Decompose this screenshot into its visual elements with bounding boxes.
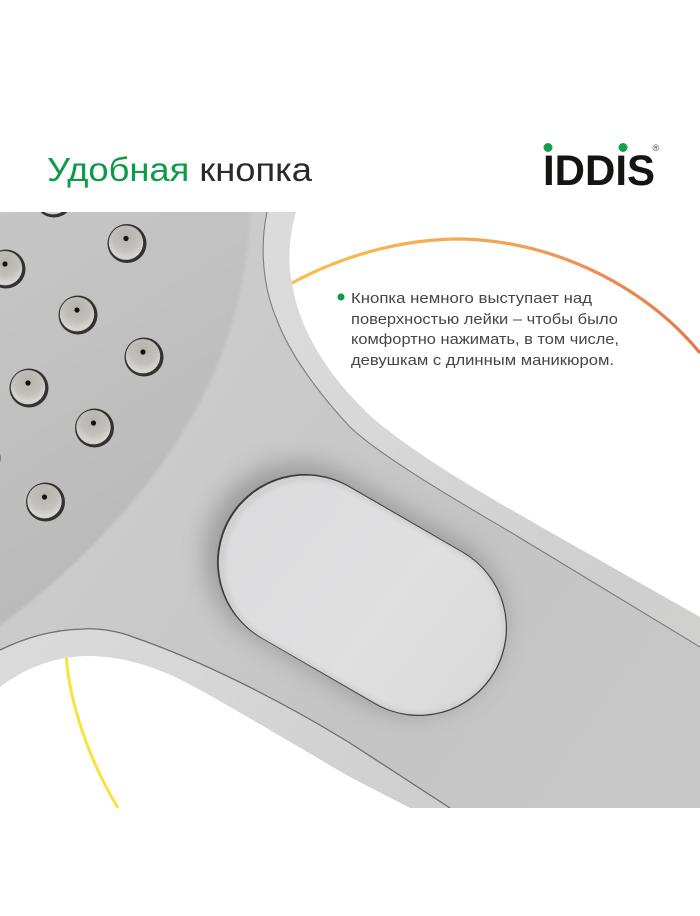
description text: Кнопка немного выступает над [351, 291, 593, 307]
shower head photo [0, 178, 700, 808]
description text: комфортно нажимать, в том числе, [351, 332, 619, 348]
bullet [338, 294, 344, 300]
button recess shadow [298, 555, 412, 621]
upper seam line [263, 212, 700, 647]
yellow arc [66, 650, 118, 808]
logo dot right [618, 143, 628, 152]
description text [351, 291, 619, 369]
description text: поверхностью лейки – чтобы было [351, 312, 618, 328]
handle inner surface [0, 212, 700, 808]
title: Удобная кнопка [47, 152, 312, 189]
orange gradient arc [290, 239, 700, 353]
lower seam line [0, 629, 450, 808]
outer rim of shower head and handle [0, 212, 700, 808]
logo: IDDIS: IDDIS [543, 147, 655, 195]
registered mark: ® [652, 143, 660, 153]
nozzles [0, 178, 164, 522]
description text: девушкам с длинным маникюром. [351, 353, 614, 369]
logo dot left [544, 143, 552, 152]
button [305, 562, 419, 628]
recessed spray face [0, 195, 250, 640]
